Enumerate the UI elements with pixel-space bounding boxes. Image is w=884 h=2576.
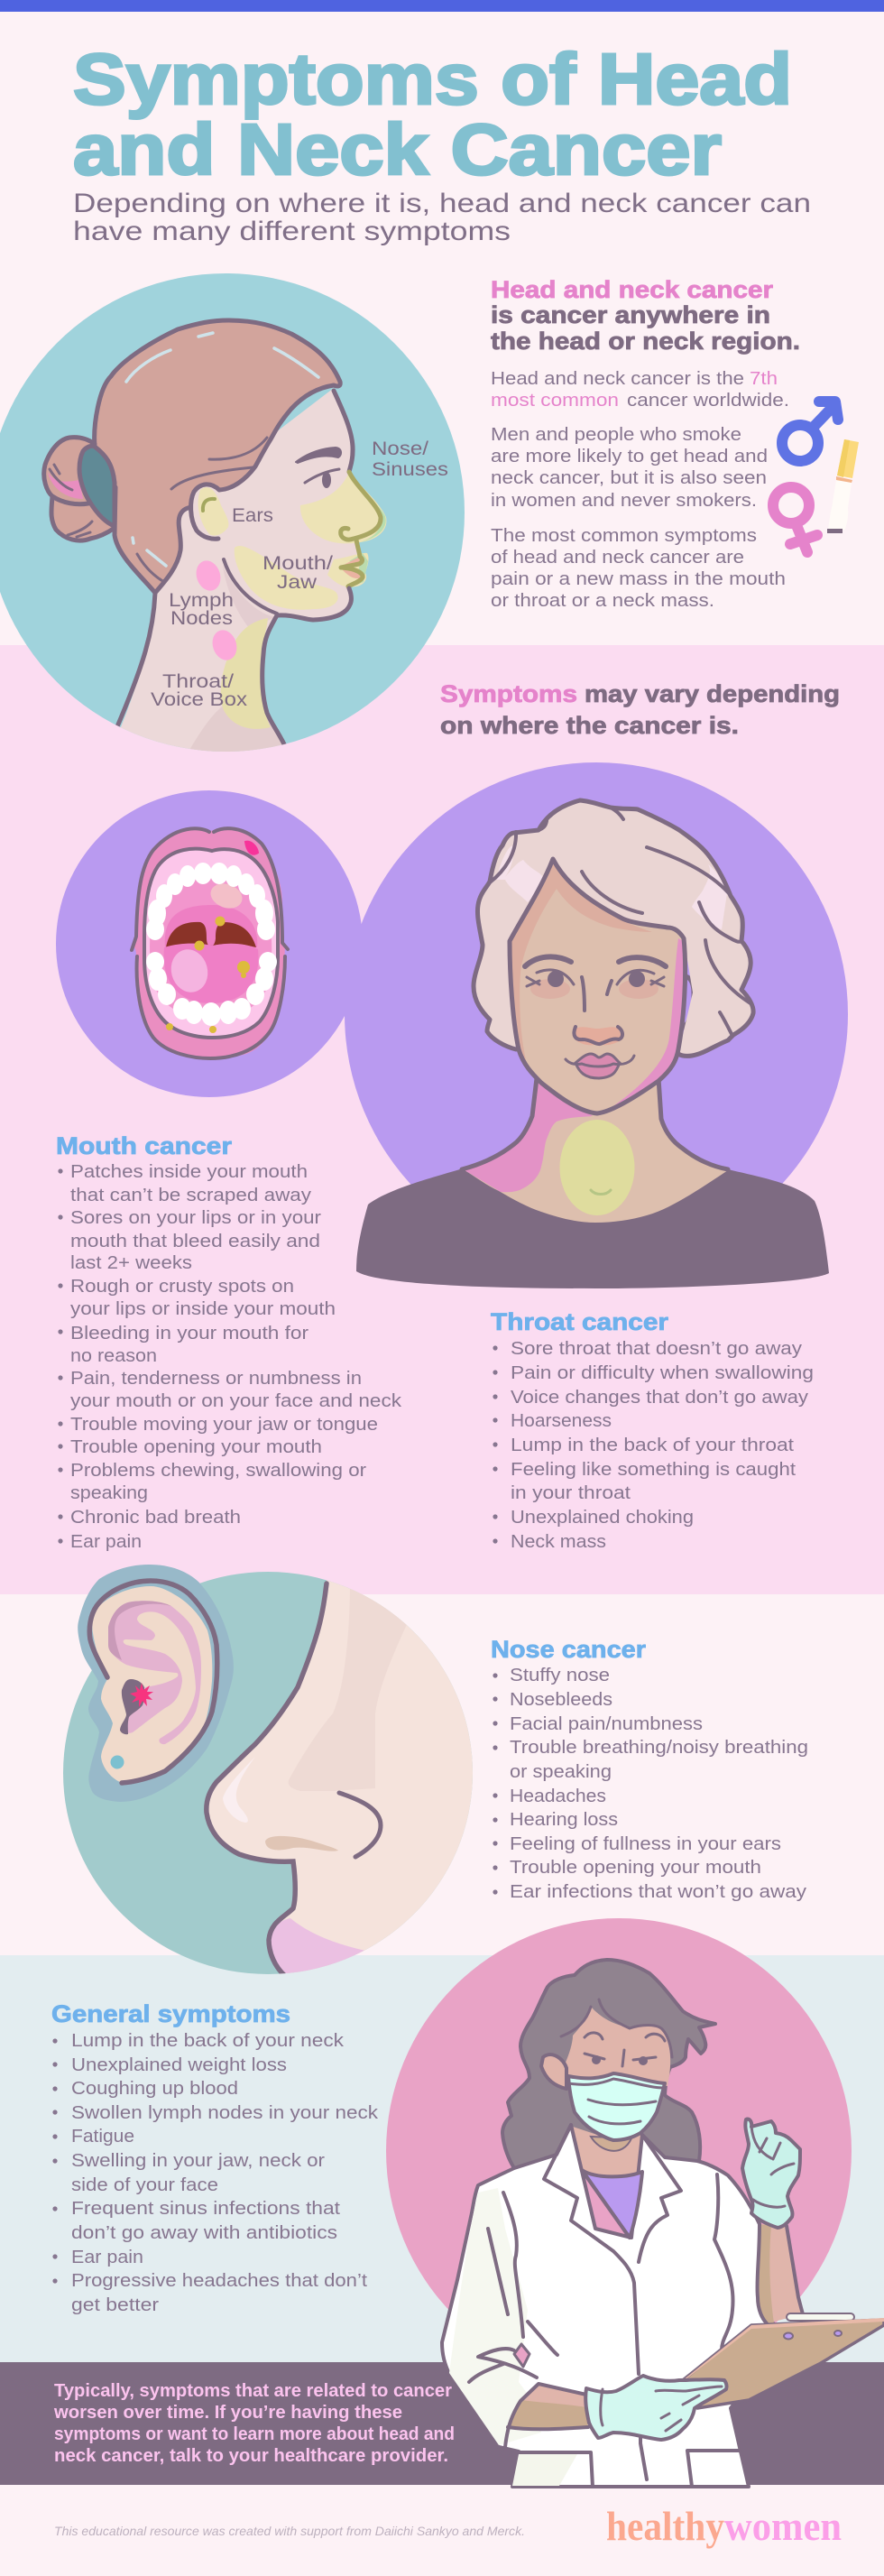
section: mouth cancer: your lips or inside your mouth — [70, 1299, 336, 1319]
raised glove — [742, 2119, 800, 2228]
section: throat cancer: Neck mass — [511, 1532, 606, 1552]
lapels — [469, 2125, 740, 2487]
section: general symptoms: get better — [71, 2295, 159, 2315]
section: nose cancer: Trouble breathing/noisy breathing — [510, 1738, 808, 1758]
intro text: neck cancer, but it is also seen — [491, 468, 767, 488]
section: throat cancer: in your throat — [511, 1483, 631, 1503]
closing message: neck cancer, talk to your healthcare provider. — [54, 2446, 448, 2466]
section: mouth cancer: Ear pain — [70, 1532, 142, 1552]
section: mouth cancer: Problems chewing, swallowing or — [70, 1461, 366, 1481]
region labels: Sinuses — [372, 459, 448, 480]
section: general symptoms: Frequent sinus infections that — [71, 2199, 340, 2219]
intro text: most common — [491, 391, 619, 411]
section: mouth cancer: Sores on your lips or in your — [70, 1208, 321, 1228]
section: throat cancer — [491, 1308, 814, 1552]
subtitle: have many different symptoms — [73, 217, 511, 246]
face outline — [334, 391, 353, 472]
nose highlight — [223, 1757, 255, 1823]
section: general symptoms: Unexplained weight loss — [71, 2055, 287, 2075]
section: nose cancer: Ear infections that won’t go away — [510, 1882, 806, 1902]
hair — [474, 800, 753, 1056]
face — [564, 2007, 670, 2086]
hair — [95, 320, 340, 593]
eye — [305, 469, 339, 483]
section: throat cancer: Sore throat that doesn’t go away — [511, 1339, 802, 1359]
sore on lip — [245, 842, 258, 854]
section: nose cancer: Hearing loss — [510, 1810, 618, 1830]
section: general symptoms: Coughing up blood — [71, 2079, 238, 2099]
clipboard — [674, 2320, 884, 2408]
section: general symptoms: Ear pain — [71, 2248, 143, 2267]
section: mouth cancer: no reason — [70, 1346, 157, 1366]
panel background: closing message band — [0, 2362, 884, 2485]
footer credit: This educational resource was created with support from Daiichi Sankyo and Merck. — [54, 2524, 525, 2538]
region labels: Voice Box — [151, 689, 248, 710]
logo: healthywomen: healthy — [606, 2503, 724, 2549]
logo: healthywomen — [606, 2503, 842, 2549]
neck — [572, 2127, 642, 2176]
section: mouth cancer: Pain, tenderness or numbness in — [70, 1369, 362, 1389]
section: mouth cancer: last 2+ weeks — [70, 1253, 192, 1273]
chin — [271, 1918, 364, 1973]
eyebrows — [525, 956, 666, 966]
intro text: Men and people who smoke — [491, 425, 741, 445]
region labels: Lymph — [169, 590, 234, 611]
hair highlights — [126, 333, 318, 566]
nose — [575, 1027, 622, 1045]
section: mouth cancer: Trouble moving your jaw or tongue — [70, 1415, 378, 1435]
subtitle: Depending on where it is, head and neck cancer can — [73, 189, 811, 218]
section: general symptoms: don’t go away with antibiotics — [71, 2223, 337, 2243]
section: nose cancer: Feeling of fullness in your ears — [510, 1834, 781, 1854]
section: nose cancer: Stuffy nose — [510, 1666, 610, 1685]
closing message: symptoms or want to learn more about head and — [54, 2424, 455, 2444]
section: throat cancer: Hoarseness — [511, 1411, 612, 1431]
region labels: Nose/ — [372, 439, 428, 459]
lymph nodes — [197, 560, 220, 591]
intro text: pain or a new mass in the mouth — [491, 569, 786, 589]
intro text: 7th — [750, 369, 778, 389]
section: mouth cancer: Trouble opening your mouth — [70, 1437, 322, 1457]
intro text — [491, 369, 789, 611]
left forearm — [508, 2384, 588, 2429]
nose and sinus region — [300, 472, 386, 543]
section: general symptoms: side of your face — [71, 2175, 218, 2195]
section: mouth cancer: Bleeding in your mouth for — [70, 1324, 308, 1343]
shirt — [582, 2170, 642, 2238]
teeth — [146, 863, 277, 1026]
coat shading — [449, 2188, 541, 2445]
under-eye shadows — [530, 979, 570, 999]
section: nose cancer: or speaking — [510, 1762, 612, 1782]
face profile line — [207, 1583, 327, 1976]
neck — [465, 1074, 728, 1223]
heading: symptoms vary — [440, 680, 840, 739]
intro heading: the head or neck region. — [491, 328, 800, 355]
section: general symptoms: Progressive headaches that don’t — [71, 2271, 367, 2291]
section: general symptoms: Lump in the back of your neck — [71, 2031, 345, 2051]
section: general symptoms: Swelling in your jaw, neck or — [71, 2151, 325, 2171]
title: Symptoms of Head — [73, 39, 792, 119]
section: nose cancer — [491, 1636, 808, 1902]
illustration: older woman face with throat highlighted — [356, 800, 829, 1288]
hair highlights — [496, 845, 727, 929]
intro text: or throat or a neck mass. — [491, 591, 714, 611]
section: nose cancer: Trouble opening your mouth — [510, 1858, 761, 1878]
intro text: are more likely to get head and — [491, 447, 768, 466]
hair tie — [79, 446, 115, 526]
mask — [568, 2073, 665, 2140]
heading: symptoms vary: Symptoms — [440, 680, 577, 707]
lips — [343, 558, 361, 579]
clipboard clip — [787, 2313, 854, 2321]
shirt — [356, 1169, 829, 1288]
nose wing — [339, 1793, 381, 1857]
intro text: of head and neck cancer are — [491, 548, 744, 568]
ear — [541, 2054, 566, 2089]
intro heading: Head and neck cancer — [491, 276, 774, 303]
section: mouth cancer: Patches inside your mouth — [70, 1162, 308, 1182]
region labels: Nodes — [170, 608, 233, 629]
illustration: head profile with labelled regions — [0, 273, 465, 758]
section: throat cancer: Unexplained choking — [511, 1508, 694, 1528]
illustration: ear and nose — [63, 1565, 478, 1980]
section: general symptoms: Fatigue — [71, 2127, 134, 2147]
closing message — [53, 2381, 455, 2466]
region labels: Ears — [232, 505, 273, 526]
ear canal — [120, 1679, 144, 1734]
section: throat cancer: Pain or difficulty when swallowing — [511, 1363, 814, 1383]
eyebrow — [296, 448, 341, 463]
section: mouth cancer: Rough or crusty spots on — [70, 1277, 294, 1297]
hair strands — [490, 808, 750, 1036]
region labels: Throat/ — [162, 671, 234, 692]
section: throat cancer: Voice changes that don’t go away — [511, 1388, 808, 1408]
section: nose cancer: Nose cancer — [491, 1636, 647, 1663]
title: and Neck Cancer — [73, 109, 722, 189]
holding glove — [585, 2376, 727, 2440]
logo: healthywomen: women — [724, 2503, 842, 2549]
region labels: Mouth/ — [262, 553, 333, 574]
ears — [498, 972, 514, 1026]
face — [510, 859, 686, 1113]
icon: female symbol — [773, 487, 817, 552]
panel background: symptoms by location — [0, 645, 884, 1594]
section: mouth cancer: that can’t be scraped away — [70, 1186, 311, 1205]
panel background: general symptoms — [0, 1955, 884, 2362]
earring — [110, 1756, 124, 1768]
icon: male symbol — [782, 402, 838, 461]
intro heading: is cancer anywhere in — [491, 301, 770, 328]
section: general symptoms: General symptoms — [51, 2000, 290, 2027]
region labels: Jaw — [277, 572, 318, 593]
throat region — [221, 618, 271, 729]
ear — [193, 487, 218, 509]
illustration: open mouth — [56, 762, 848, 1266]
closing message: Typically, symptoms that are related to cancer — [54, 2381, 452, 2401]
section: nose cancer: Nosebleeds — [510, 1690, 612, 1710]
illustration: doctor with mask, gloves and clipboard — [386, 1918, 884, 2487]
section: throat cancer: Feeling like something is caught — [511, 1460, 796, 1480]
mouth — [576, 1054, 620, 1078]
closing message: worsen over time. If you’re having these — [53, 2403, 402, 2423]
eyebrows and eyes — [585, 2033, 665, 2041]
icon: cigarette — [827, 439, 859, 533]
title — [73, 39, 792, 189]
icon: pain star — [130, 1683, 153, 1707]
right arm — [758, 2224, 803, 2323]
region labels — [151, 439, 448, 710]
section: nose cancer: Facial pain/numbness — [510, 1714, 703, 1734]
ear shadow — [78, 1565, 234, 1802]
eyes — [548, 971, 564, 987]
ear — [92, 1586, 212, 1782]
section: throat cancer: Lump in the back of your throat — [511, 1436, 794, 1455]
coat — [442, 2125, 776, 2487]
gap between arm and coat — [514, 2344, 529, 2367]
section: mouth cancer: speaking — [70, 1483, 148, 1503]
intro text: cancer worldwide. — [627, 391, 789, 411]
nostril — [265, 1836, 338, 1851]
white patches — [166, 917, 250, 1033]
section: mouth cancer — [56, 1132, 402, 1552]
section: mouth cancer: Mouth cancer — [56, 1132, 233, 1159]
intro heading — [491, 276, 800, 355]
intro text: The most common symptoms — [491, 526, 757, 546]
section: nose cancer: Headaches — [510, 1787, 606, 1806]
hair bun — [46, 439, 112, 539]
section: throat cancer: Throat cancer — [491, 1308, 669, 1335]
section: general symptoms — [51, 2000, 379, 2315]
intro text: in women and never smokers. — [491, 491, 757, 511]
mouth and jaw region — [235, 546, 338, 610]
section: general symptoms: Swollen lymph nodes in your neck — [71, 2103, 379, 2123]
heading: symptoms vary: may vary depending — [585, 680, 840, 707]
hair — [502, 1960, 715, 2168]
section: mouth cancer: Chronic bad breath — [70, 1508, 241, 1528]
top bar — [0, 0, 884, 12]
heading: symptoms vary: on where the cancer is. — [440, 712, 739, 739]
intro text: Head and neck cancer is the — [491, 369, 744, 389]
section: mouth cancer: mouth that bleed easily and — [70, 1232, 320, 1251]
section: mouth cancer: your mouth or on your face and neck — [70, 1391, 402, 1411]
ear folds — [108, 1601, 201, 1744]
subtitle — [73, 189, 811, 246]
